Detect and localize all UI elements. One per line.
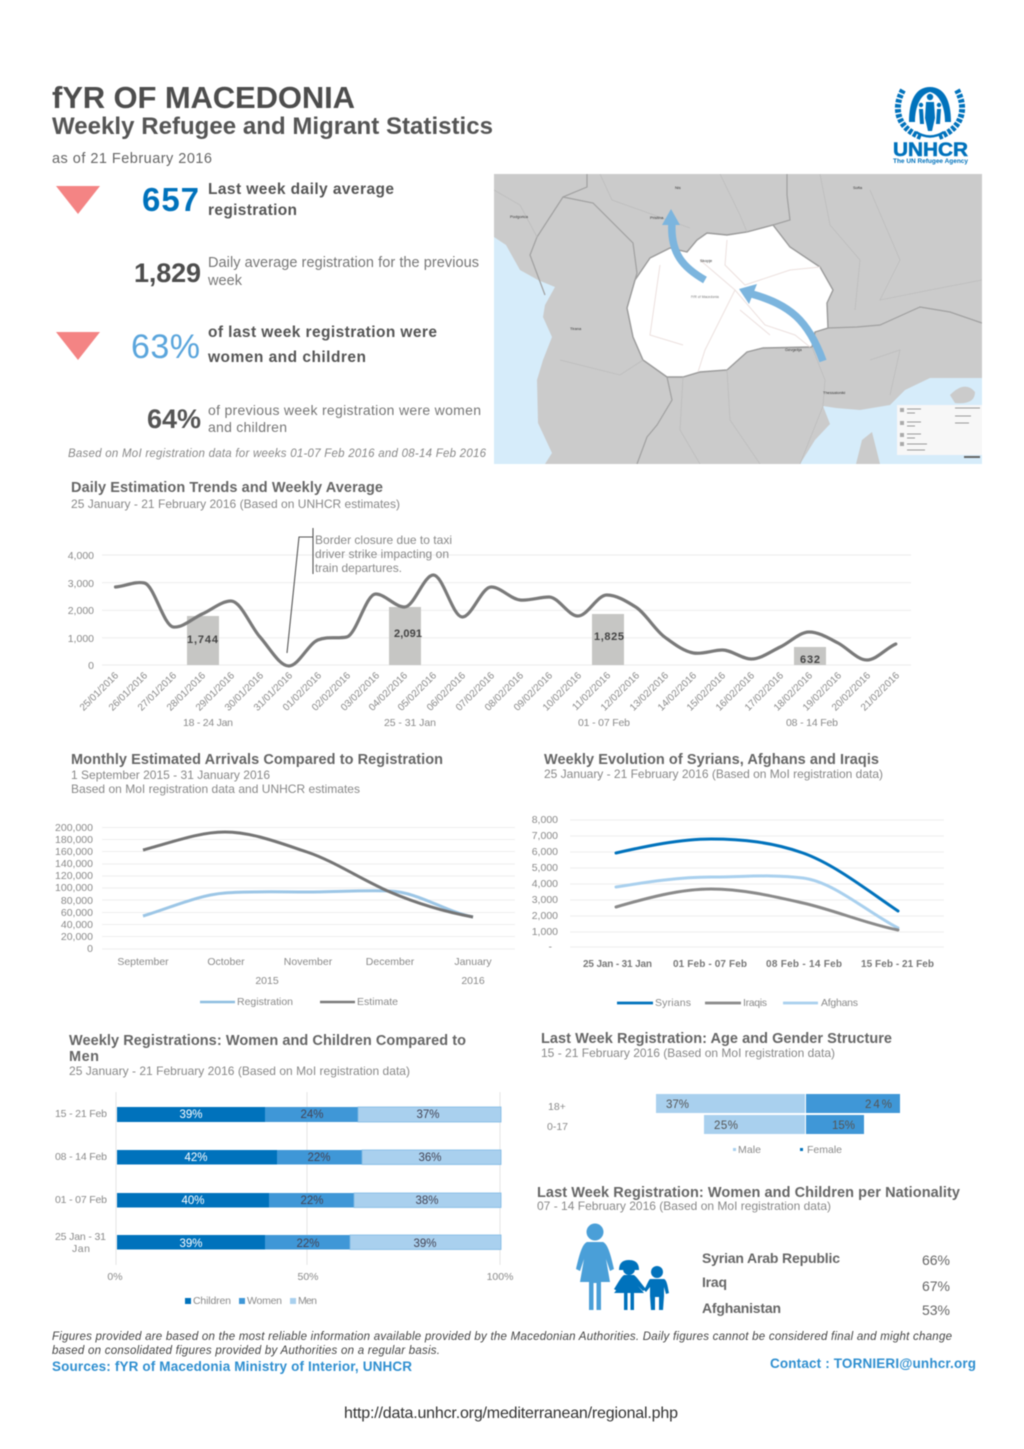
legend [185, 1295, 317, 1307]
y axis labels: 0 [88, 660, 94, 672]
chart: daily estimation trends [68, 480, 911, 729]
contact: Contact : TORNIERI@unhcr.org [770, 1356, 976, 1371]
date: as of 21 February 2016 [52, 151, 212, 167]
row: 01 - 07 Feb: 40% [181, 1195, 205, 1207]
date axis labels: 21/02/2016 [859, 670, 902, 714]
bar values: 25% [714, 1120, 738, 1132]
age labels: 18+ [548, 1101, 566, 1113]
y axis labels: 2,000 [68, 605, 94, 617]
chart: monthly arrivals vs registration [55, 752, 515, 1008]
Syrians line [616, 839, 898, 911]
legend: Iraqis [743, 997, 767, 1009]
date axis labels: 31/01/2016 [252, 670, 295, 714]
bar values: 1,825 [594, 631, 624, 643]
date axis labels: 03/02/2016 [339, 670, 382, 714]
y axis labels: 180,000 [55, 834, 93, 846]
registration line [143, 891, 473, 917]
y axis labels: 0 [87, 943, 93, 955]
map: route through fYR of Macedonia [494, 174, 982, 464]
data source note: Based on MoI registration data for weeks 01-07 Feb 2016 and 08-14 Feb 2016 [68, 448, 487, 460]
date axis labels: 25/01/2016 [78, 670, 121, 714]
row: 15 - 21 Feb: 39% [179, 1109, 203, 1121]
month labels: September [117, 956, 169, 968]
x axis labels: 100% [487, 1271, 513, 1283]
y axis labels: 6,000 [532, 846, 558, 858]
date axis labels: 02/02/2016 [310, 670, 353, 714]
y axis labels: 120,000 [55, 870, 93, 882]
nationality rows: Iraq [702, 1274, 727, 1290]
date axis labels: 17/02/2016 [743, 670, 786, 714]
previous week label: week [207, 273, 243, 289]
legend: Men [298, 1295, 317, 1307]
bar values: 2,091 [394, 628, 422, 640]
y axis labels: 4,000 [68, 550, 94, 562]
date axis labels: 15/02/2016 [685, 670, 728, 714]
map place labels [510, 185, 863, 395]
map place labels: Sofia [853, 185, 863, 190]
map place labels: Podgorica [510, 214, 529, 219]
week labels: 15 Feb - 21 Feb [861, 959, 934, 970]
date axis labels: 01/02/2016 [281, 670, 324, 714]
last week figure: 657 [142, 181, 199, 218]
y axis labels [532, 814, 558, 953]
week labels: 25 - 31 Jan [384, 717, 436, 729]
date axis labels [78, 670, 902, 714]
women and children label: of last week registration were [208, 324, 437, 341]
month labels: January [454, 956, 492, 968]
row: 15 - 21 Feb: 15 - 21 Feb [55, 1108, 107, 1120]
month labels: November [284, 956, 333, 968]
map place labels: Skopje [700, 258, 713, 263]
legend [200, 996, 398, 1008]
date axis labels: 05/02/2016 [396, 670, 439, 714]
week labels [183, 717, 838, 729]
row: 15 - 21 Feb [55, 1107, 501, 1122]
x axis labels: 0% [107, 1271, 123, 1283]
row: 25 Jan - 31 Jan: 22% [296, 1238, 320, 1250]
heading [69, 1033, 466, 1065]
date axis labels: 07/02/2016 [454, 670, 497, 714]
row: 15 - 21 Feb: 37% [416, 1109, 440, 1121]
date axis labels: 19/02/2016 [801, 670, 844, 714]
legend: Afghans [821, 997, 858, 1009]
panel: key figures [56, 181, 487, 460]
women and children label: women and children [207, 349, 366, 366]
date axis labels: 09/02/2016 [512, 670, 555, 714]
week labels: 25 Jan - 31 Jan [583, 959, 652, 970]
heading: Weekly Registrations: Women and Children Compared to [69, 1033, 466, 1049]
sources: Sources: fYR of Macedonia Ministry of Interior, UNHCR [52, 1359, 412, 1374]
date axis labels: 27/01/2016 [136, 670, 179, 714]
week labels: 01 - 07 Feb [578, 717, 630, 729]
bar values: 1,744 [187, 634, 219, 646]
callout: border closure: Border closure due to taxi [315, 533, 452, 547]
row: 01 - 07 Feb: 38% [415, 1195, 439, 1207]
y axis labels [68, 550, 94, 672]
age labels [547, 1101, 568, 1133]
date axis labels: 14/02/2016 [656, 670, 699, 714]
month labels: 2016 [461, 975, 485, 987]
footer note: Figures provided are based on the most reliable information available provided by the Macedonian Authorities. Daily figures cannot be considered final and might change [52, 1331, 952, 1343]
subheading: 25 January - 21 February 2016 (Based on MoI registration data) [544, 767, 883, 781]
row: 08 - 14 Feb: 22% [307, 1152, 331, 1164]
y axis labels: 80,000 [61, 895, 93, 907]
last week label [208, 181, 394, 219]
row: 08 - 14 Feb [55, 1150, 501, 1164]
legend [617, 997, 858, 1009]
legend: Female [807, 1144, 842, 1156]
y axis labels: 200,000 [55, 822, 93, 834]
date axis labels: 13/02/2016 [628, 670, 671, 714]
week labels: 01 Feb - 07 Feb [673, 959, 747, 970]
daily line [116, 575, 896, 666]
x axis labels [107, 1271, 513, 1283]
previous week label [207, 255, 479, 289]
chart: age and gender structure [541, 1031, 900, 1156]
map place labels: Tirana [570, 326, 582, 331]
date axis labels: 16/02/2016 [714, 670, 757, 714]
subheading: 07 - 14 February 2016 (Based on MoI registration data) [537, 1199, 831, 1213]
month labels: 2015 [255, 975, 279, 987]
estimate line [143, 832, 473, 917]
weekly average bars [187, 607, 826, 665]
row: 25 Jan - 31 Jan: 39% [413, 1238, 437, 1250]
week labels: 18 - 24 Jan [183, 717, 233, 729]
legend: Syrians [655, 997, 691, 1009]
row: 08 - 14 Feb: 36% [418, 1152, 442, 1164]
icon: mother and children [576, 1224, 669, 1310]
previous week figure: 1,829 [134, 258, 201, 288]
previous women and children label [208, 402, 481, 435]
subheading: 1 September 2015 - 31 January 2016 [71, 768, 270, 782]
subheading: 25 January - 21 February 2016 (Based on MoI registration data) [69, 1064, 410, 1078]
heading: Last Week Registration: Age and Gender Structure [541, 1031, 892, 1047]
legend: Women [247, 1295, 282, 1307]
y axis labels: 40,000 [61, 919, 93, 931]
row: 01 - 07 Feb [55, 1193, 501, 1208]
heading: Men [69, 1049, 99, 1065]
last week label: Last week daily average [208, 181, 394, 198]
x axis labels: 50% [297, 1271, 319, 1283]
title: fYR OF MACEDONIA [52, 80, 355, 115]
date axis labels: 26/01/2016 [107, 670, 150, 714]
legend: Male [738, 1144, 761, 1156]
row: 25 Jan - 31 Jan: 25 Jan - 31 [55, 1231, 106, 1243]
subtitle: Weekly Refugee and Migrant Statistics [52, 113, 493, 140]
date axis labels: 06/02/2016 [425, 670, 468, 714]
row: 25 Jan - 31 Jan: Jan [72, 1243, 90, 1255]
subheading: Based on MoI registration data and UNHCR estimates [71, 782, 360, 796]
nationality rows: Afghanistan [702, 1300, 781, 1316]
y axis labels: 3,000 [68, 578, 94, 590]
legend [733, 1144, 842, 1156]
y axis labels [55, 822, 93, 955]
previous women and children figure: 64% [147, 404, 201, 434]
map place labels: Gevgelija [785, 347, 802, 352]
Iraqis line [616, 889, 898, 930]
icon: down triangle [56, 186, 100, 214]
y axis labels: 20,000 [61, 931, 93, 943]
women and children label [207, 324, 437, 366]
map place labels: fYR of Macedonia [691, 295, 719, 299]
legend: Children [193, 1295, 231, 1307]
callout: border closure: driver strike impacting on [315, 547, 449, 561]
y axis labels: 140,000 [55, 858, 93, 870]
bar values [187, 628, 820, 666]
map legend [897, 405, 982, 458]
legend: Registration [237, 996, 293, 1008]
heading: Monthly Estimated Arrivals Compared to Registration [71, 752, 443, 768]
date axis labels: 12/02/2016 [599, 670, 642, 714]
nationality rows: 53% [922, 1302, 950, 1318]
last week label: registration [208, 202, 297, 219]
date axis labels: 29/01/2016 [194, 670, 237, 714]
date axis labels: 04/02/2016 [367, 670, 410, 714]
subheading [71, 768, 360, 796]
date axis labels: 10/02/2016 [541, 670, 584, 714]
y axis labels: 8,000 [532, 814, 558, 826]
chart: weekly evolution by nationality [532, 752, 944, 1009]
previous women and children label: of previous week registration were women [208, 402, 481, 418]
previous women and children label: and children [208, 419, 287, 435]
month labels: December [366, 956, 415, 968]
y axis labels: 60,000 [61, 907, 93, 919]
bars [656, 1094, 900, 1134]
bar values: 15% [832, 1120, 855, 1132]
footer note: based on consolidated figures provided by Authorities on a regular basis. [52, 1345, 440, 1357]
date axis labels: 20/02/2016 [830, 670, 873, 714]
age labels: 0-17 [547, 1121, 568, 1133]
nationality rows [702, 1250, 950, 1318]
callout: border closure [287, 528, 452, 653]
map place labels: Thessaloniki [823, 390, 845, 395]
row: 08 - 14 Feb: 08 - 14 Feb [55, 1151, 107, 1163]
date axis labels: 28/01/2016 [165, 670, 208, 714]
map place labels: Pristina [650, 215, 664, 220]
icon: UNHCR logo: UNHCR [893, 140, 968, 161]
nationality rows: 67% [922, 1278, 950, 1294]
nationality rows: Syrian Arab Republic [702, 1250, 840, 1266]
arrow: entry route from south [739, 284, 823, 361]
callout: border closure: train departures. [315, 561, 402, 575]
bar values: 632 [800, 654, 820, 666]
icon: UNHCR logo: The UN Refugee Agency [893, 158, 968, 165]
month labels [117, 956, 492, 987]
date axis labels: 18/02/2016 [772, 670, 815, 714]
row: 01 - 07 Feb: 22% [300, 1195, 324, 1207]
row: 01 - 07 Feb: 01 - 07 Feb [55, 1194, 107, 1206]
url: http://data.unhcr.org/mediterranean/regional.php [344, 1405, 678, 1422]
panel: women and children per nationality [537, 1185, 960, 1318]
y axis labels: 100,000 [55, 882, 93, 894]
y axis labels: 7,000 [532, 830, 558, 842]
month labels: October [207, 956, 245, 968]
bar values [666, 1099, 892, 1132]
y axis labels: 2,000 [532, 910, 558, 922]
week labels: 08 Feb - 14 Feb [766, 959, 842, 970]
bar values: 24% [865, 1099, 892, 1111]
chart: women and children compared to men [55, 1033, 513, 1307]
y axis labels: 5,000 [532, 862, 558, 874]
row: 08 - 14 Feb: 42% [184, 1152, 208, 1164]
heading: Last Week Registration: Women and Children per Nationality [537, 1185, 960, 1201]
Afghans line [616, 876, 898, 928]
week labels [583, 959, 934, 970]
heading: Weekly Evolution of Syrians, Afghans and Iraqis [544, 752, 879, 768]
row: 25 Jan - 31 Jan [55, 1231, 501, 1255]
row: 25 Jan - 31 Jan: 39% [179, 1238, 203, 1250]
y axis labels: 4,000 [532, 878, 558, 890]
footer note [52, 1331, 952, 1357]
header: title block [52, 80, 493, 167]
bar values: 37% [666, 1099, 689, 1111]
y axis labels: 1,000 [68, 633, 94, 645]
icon: down triangle [56, 332, 100, 360]
week labels: 08 - 14 Feb [786, 717, 838, 729]
subheading: 25 January - 21 February 2016 (Based on UNHCR estimates) [71, 497, 400, 511]
nationality rows: 66% [922, 1252, 950, 1268]
map place labels: Nis [675, 185, 681, 190]
icon: UNHCR logo [893, 87, 968, 165]
legend: Estimate [357, 996, 398, 1008]
y axis labels: 3,000 [532, 894, 558, 906]
row: 15 - 21 Feb: 24% [300, 1109, 324, 1121]
y axis labels: 160,000 [55, 846, 93, 858]
subheading: 15 - 21 February 2016 (Based on MoI registration data) [541, 1046, 835, 1060]
arrow: exit route north [662, 209, 705, 280]
date axis labels: 30/01/2016 [223, 670, 266, 714]
previous week label: Daily average registration for the previous [208, 255, 479, 271]
heading: Daily Estimation Trends and Weekly Average [71, 480, 383, 496]
date axis labels: 11/02/2016 [570, 670, 613, 713]
y axis labels: - [548, 941, 552, 953]
women and children figure: 63% [131, 328, 200, 366]
date axis labels: 08/02/2016 [483, 670, 526, 714]
y axis labels: 1,000 [532, 926, 558, 938]
